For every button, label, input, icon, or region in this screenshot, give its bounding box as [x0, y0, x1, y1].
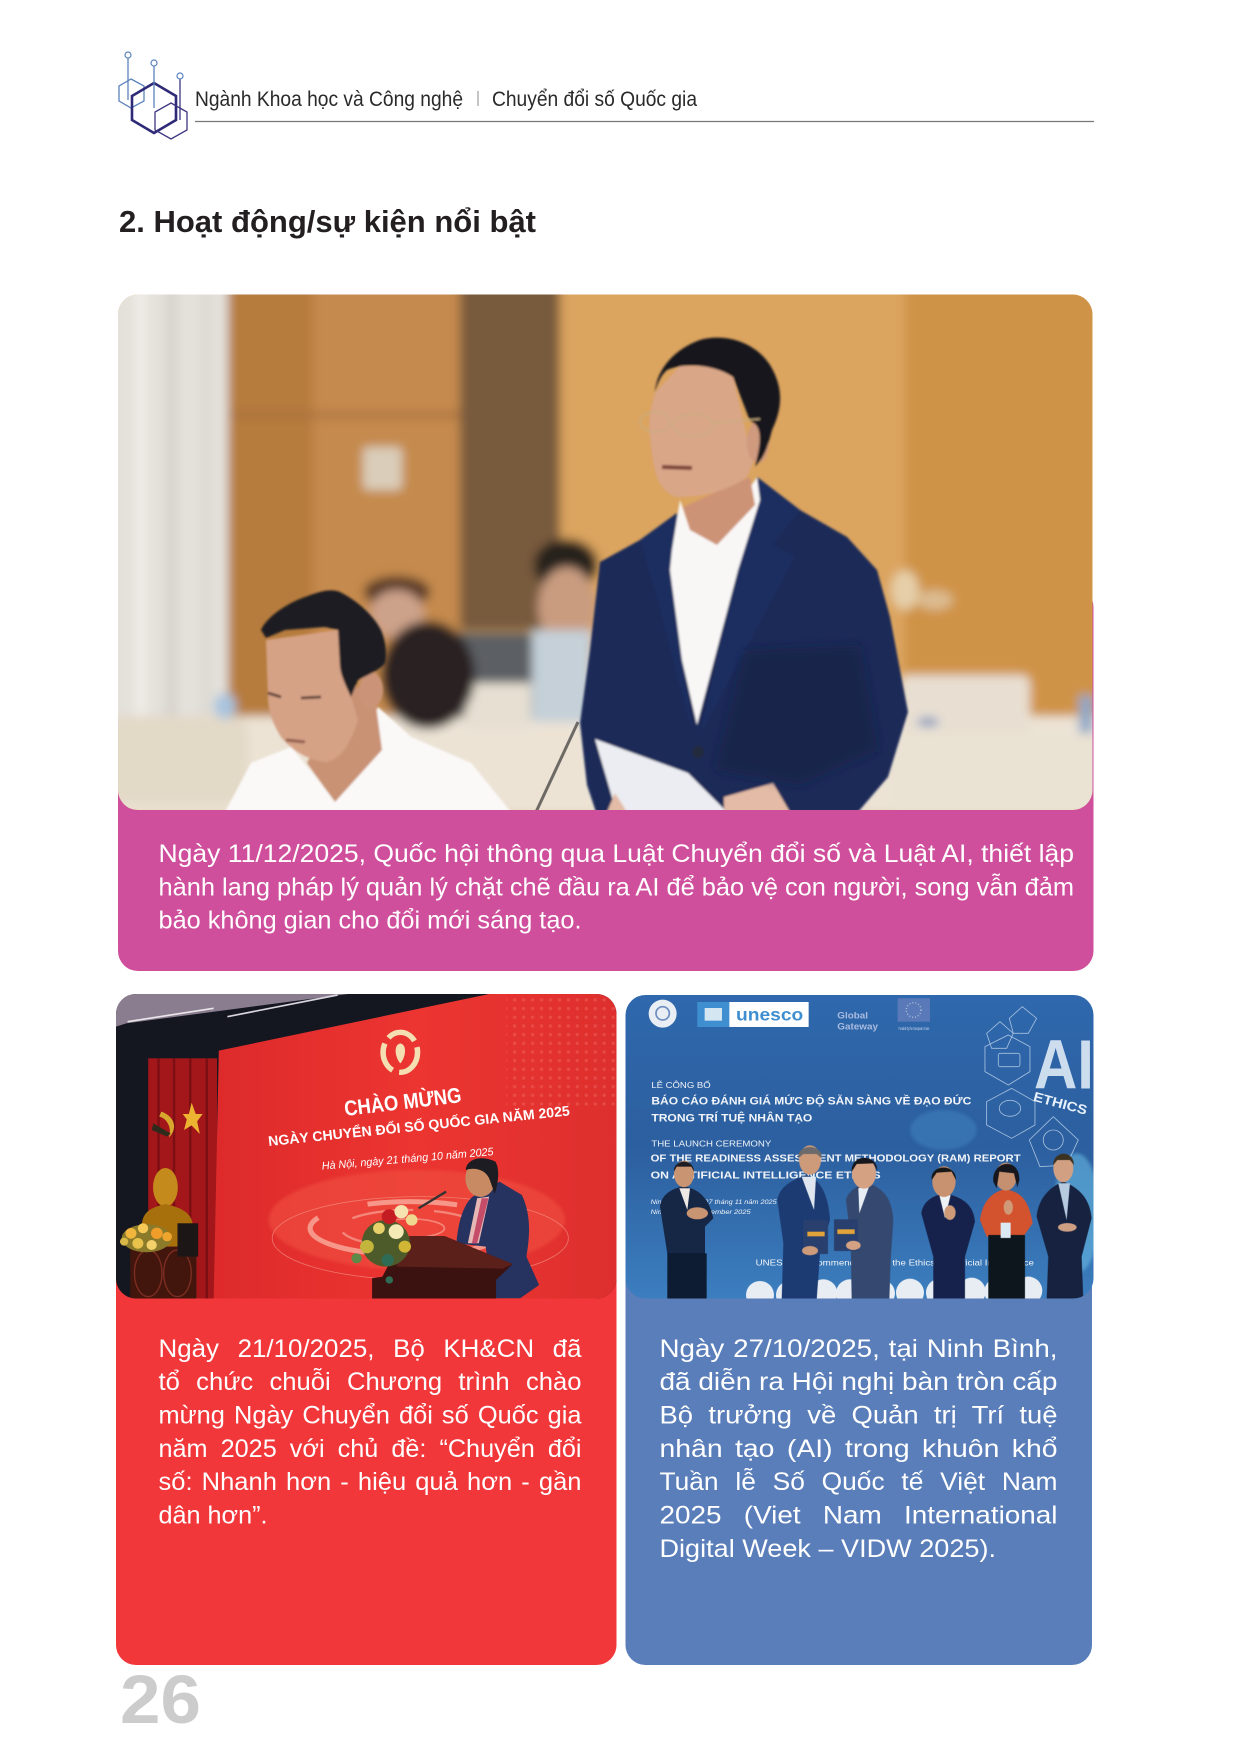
caption text: pink — [158, 840, 1074, 934]
microphone — [536, 722, 578, 812]
lectern — [372, 1236, 513, 1300]
screen title: CHÀO MỪNG — [343, 1083, 463, 1121]
person 1 — [660, 1161, 713, 1300]
screen title — [267, 1083, 571, 1173]
photo: digital transformation day ceremony — [110, 990, 623, 1307]
stage backdrop text: LỄ CÔNG BỐ — [651, 1079, 711, 1090]
caption text: pink: hành lang pháp lý quản lý chặt chẽ đầu ra AI để bảo vệ con người, song vẫn đảm — [158, 872, 1074, 902]
AI ethics graphic: AI — [1034, 1025, 1094, 1103]
logos row: Funded by the European Union — [899, 1026, 930, 1031]
header label: sector: Ngành Khoa học và Công nghệ — [195, 88, 463, 111]
caption text: pink: Ngày 11/12/2025, Quốc hội thông qua Luật Chuyển đổi số và Luật AI, thiết lập — [158, 840, 1074, 868]
flowers at lectern — [351, 1205, 418, 1284]
caption background: pink — [118, 587, 1094, 971]
header label: topic: Chuyển đổi số Quốc gia — [492, 88, 697, 111]
caption text: blue: đã diễn ra Hội nghị bàn tròn cấp — [660, 1367, 1058, 1396]
caption text: blue: nhân tạo (AI) trong khuôn khổ — [660, 1435, 1058, 1463]
logos row — [649, 998, 930, 1031]
standing man — [580, 338, 908, 814]
caption background: red — [116, 1100, 616, 1665]
person 6 — [1037, 1154, 1092, 1300]
person 5 — [980, 1163, 1033, 1300]
caption text: red: tổ chức chuỗi Chương trình chào — [158, 1367, 582, 1396]
caption text: blue: Ngày 27/10/2025, tại Ninh Bình, — [660, 1335, 1058, 1363]
caption text: red: dân hơn”. — [158, 1502, 268, 1530]
stage backdrop text — [651, 1079, 1034, 1267]
person 3 — [846, 1158, 893, 1300]
photo: UNESCO report launch ceremony — [623, 993, 1100, 1309]
logos row: unesco — [736, 1005, 803, 1025]
page number: 26 — [120, 1661, 201, 1738]
person 4 — [921, 1166, 975, 1300]
flowers at bust — [120, 1223, 172, 1252]
caption text: red: số: Nhanh hơn - hiệu quả hơn - gần — [158, 1468, 582, 1496]
heading: 2. Hoạt động/sự kiện nổi bật — [119, 204, 536, 239]
caption text: blue: Bộ trưởng về Quản trị Trí tuệ — [660, 1402, 1058, 1430]
panel: national assembly law — [105, 280, 1105, 971]
stage backdrop text: OF THE READINESS ASSESSMENT METHODOLOGY (RAM) REPORT — [651, 1154, 1021, 1165]
stage backdrop text: TRONG TRÍ TUỆ NHÂN TẠO — [651, 1112, 812, 1125]
caption text: blue: 2025 (Viet Nam International — [660, 1502, 1058, 1530]
caption text: blue — [660, 1335, 1058, 1563]
bottom circle icons — [746, 1276, 1042, 1298]
caption background: blue — [626, 1100, 1092, 1665]
caption text: blue: Digital Week – VIDW 2025). — [660, 1535, 996, 1563]
bronze bust — [130, 1168, 198, 1300]
caption text: blue: Tuần lễ Số Quốc tế Việt Nam — [660, 1467, 1058, 1496]
stage backdrop text: BÁO CÁO ĐÁNH GIÁ MỨC ĐỘ SẴN SÀNG VỀ ĐẠO ĐỨC — [651, 1094, 972, 1107]
caption text: red: năm 2025 với chủ đề: “Chuyển đổi — [158, 1435, 582, 1463]
seated man — [225, 590, 511, 812]
screen graphic: tech circles — [272, 1197, 568, 1280]
panel: national digital transformation day — [110, 990, 623, 1665]
caption text: pink: bảo không gian cho đổi mới sáng tạo. — [158, 906, 582, 934]
booklets — [802, 1219, 861, 1255]
header — [119, 52, 1094, 139]
caption text: red: Ngày 21/10/2025, Bộ KH&CN đã — [158, 1335, 582, 1363]
AI ethics graphic — [1034, 1040, 1090, 1114]
page — [116, 51, 1094, 1724]
AI ethics graphic: ETHICS — [1032, 1089, 1089, 1118]
icon: hexagon network logo — [119, 52, 187, 139]
panel: AI governance roundtable — [623, 993, 1100, 1665]
star and emblem — [183, 1103, 203, 1134]
logos row: Gateway — [837, 1021, 879, 1031]
screen title: Hà Nội, ngày 21 tháng 10 năm 2025 — [321, 1146, 495, 1173]
speaker — [456, 1158, 539, 1298]
suit shadow — [715, 645, 878, 785]
caption text: red: mừng Ngày Chuyển đổi số Quốc gia — [158, 1402, 582, 1430]
person 2 — [777, 1145, 830, 1300]
screen logo — [383, 1032, 418, 1072]
hexagon graphics — [985, 1007, 1078, 1167]
stage backdrop text: UNESCO Recommendation on the Ethics of Artificial Intelligence — [756, 1257, 1034, 1267]
caption text: red — [158, 1335, 582, 1530]
screen title: NGÀY CHUYỂN ĐỔI SỐ QUỐC GIA NĂM 2025 — [267, 1102, 571, 1150]
stage backdrop text: ON ARTIFICIAL INTELLIGENCE ETHICS — [651, 1170, 881, 1181]
photo: minister speaking at National Assembly — [105, 280, 1105, 818]
logos row: Global — [837, 1011, 868, 1021]
stage backdrop text: THE LAUNCH CEREMONY — [651, 1138, 772, 1148]
stage backdrop text: Ninh Binh, 27 November 2025 — [651, 1209, 751, 1216]
stage backdrop text: Ninh Bình, ngày 27 tháng 11 năm 2025 — [651, 1199, 777, 1206]
